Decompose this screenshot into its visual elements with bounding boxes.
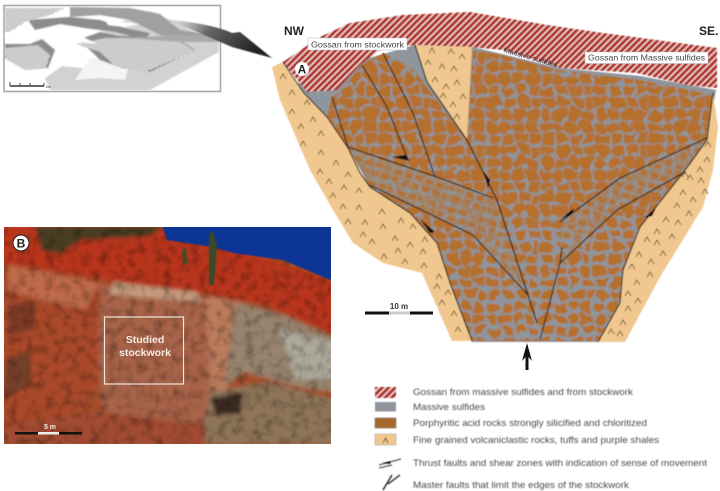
legend: massive sulfides (375, 402, 485, 413)
photo scale bar: 5 m (44, 424, 56, 431)
label: B (13, 235, 29, 251)
label: gossan from stockwork: Gossan from stockwork (311, 40, 405, 50)
label: NW: NW (284, 24, 305, 38)
label: massive sulfides: Massive sulfides (502, 47, 559, 70)
movement arrows (392, 155, 656, 233)
scale bar 10 m: 10 m (390, 302, 408, 311)
legend (375, 387, 707, 491)
location map (4, 6, 220, 92)
arrow from map to section (165, 19, 272, 58)
studied stockwork box: stockwork (119, 347, 171, 359)
tuff symbols (280, 48, 711, 336)
map scale bar: km (46, 85, 51, 89)
scale bar 10 m (365, 302, 433, 314)
unit: sheared zone right (560, 138, 707, 263)
legend: gossan: Gossan from massive sulfides and from stockwork (413, 387, 633, 398)
photo B (0, 220, 340, 448)
label: B: B (17, 236, 26, 250)
legend: thrust faults: Thrust faults and shear zones with indication of sense of movement (413, 458, 707, 469)
map scale bar (10, 82, 51, 89)
studied stockwork box (104, 317, 184, 384)
legend: porphyritic rocks: Porphyritic acid rocks strongly silicified and chloritized (413, 418, 647, 429)
unit: tan middle wedge (415, 45, 472, 140)
unit: stockwork upper right block (466, 50, 712, 230)
unit: sheared zone left (348, 148, 528, 295)
unit: stockwork left block (326, 52, 498, 290)
label: A (295, 62, 309, 76)
geological cross-section A (272, 12, 720, 370)
legend: volcaniclastic rocks: Fine grained volcaniclastic rocks, tuffs and purple shales (413, 435, 659, 446)
photo scale bar (15, 424, 82, 434)
label: SE: SE. (699, 24, 718, 38)
legend: master faults: Master faults that limit the edges of the stockwork (413, 480, 629, 491)
unit: gossan hatch (283, 12, 717, 92)
master and thrust faults (283, 45, 713, 342)
legend: master faults (383, 475, 629, 491)
section location arrow (522, 343, 532, 370)
unit: tan right (598, 93, 718, 342)
unit: tan left (272, 62, 472, 341)
unit: stockwork funnel (438, 215, 646, 342)
unit: massive sulfides base (296, 45, 716, 342)
sky (162, 227, 331, 281)
label: A: A (298, 62, 307, 76)
legend: massive sulfides: Massive sulfides (413, 402, 485, 413)
label: gossan from massive sulfides: Gossan from Massive sulfides (588, 52, 705, 62)
studied stockwork box: Studied (126, 334, 164, 346)
